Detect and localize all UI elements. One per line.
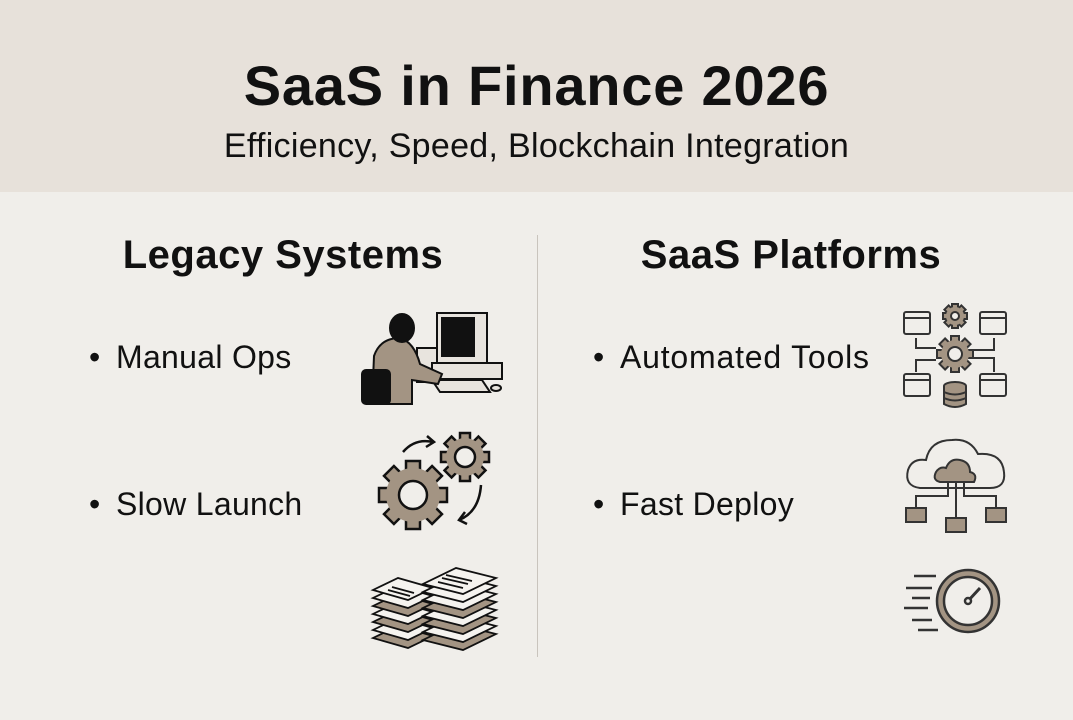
subtitle: Efficiency, Speed, Blockchain Integration [224,127,849,165]
bullet: manual ops: Manual Ops [116,339,292,375]
header band [0,0,1073,192]
bullet: automated tools: • [593,339,605,375]
heading: saas platforms: SaaS Platforms [641,233,941,277]
icon: person at computer [361,312,503,405]
bullet: fast deploy: • [593,486,605,522]
icon: automation workflow [903,303,1007,408]
icon: paper stacks [370,567,498,651]
bullet: fast deploy: Fast Deploy [620,486,794,522]
title: SaaS in Finance 2026 [244,54,829,117]
icon: gears [378,432,490,530]
icon: cloud network [905,438,1007,533]
bullet: slow launch: Slow Launch [116,486,303,522]
icon: speedometer [904,568,1000,634]
bullet: slow launch: • [89,486,101,522]
bullet: manual ops: • [89,339,101,375]
bullet: automated tools: Automated Tools [620,339,870,375]
heading: legacy systems: Legacy Systems [123,233,443,277]
